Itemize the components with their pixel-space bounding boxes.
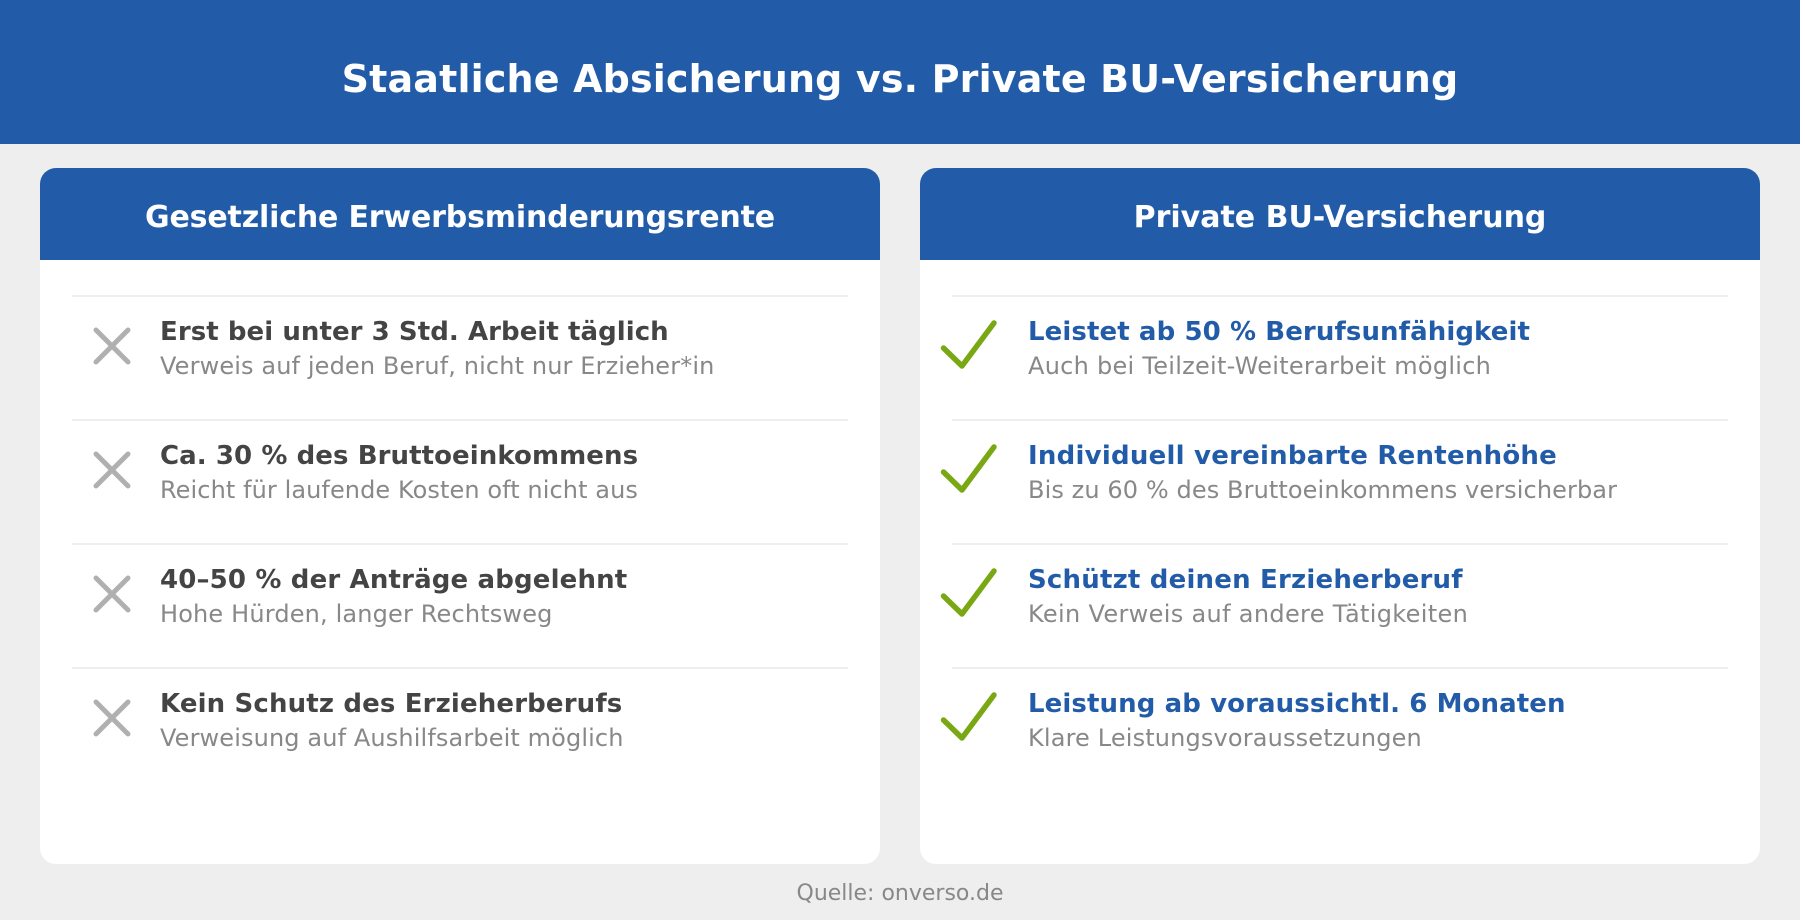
item heading: 40–50 % der Anträge abgelehnt [160,565,627,595]
panel heading: left: Gesetzliche Erwerbsminderungsrente [145,200,775,235]
header band [0,0,1800,144]
icon: cross [94,452,130,488]
item heading: Leistung ab voraussichtl. 6 Monaten [1028,689,1566,719]
panel: Private BU-Versicherung [920,168,1760,864]
item heading: Kein Schutz des Erzieherberufs [160,689,622,719]
item text: Kein Verweis auf andere Tätigkeiten [1028,600,1468,628]
item: Ca. 30 % [94,441,638,504]
panel header: right [920,168,1760,260]
item: Kein Schutz [94,689,624,752]
item text: Verweis auf jeden Beruf, nicht nur Erzieher*in [160,352,714,380]
icon: check [940,568,997,617]
title: Staatliche Absicherung vs. Private BU-Versicherung [342,57,1458,101]
icon: check [940,692,997,741]
item text: Verweisung auf Aushilfsarbeit möglich [160,724,624,752]
item: Leistet ab 50 % [940,317,1530,380]
item text: Bis zu 60 % des Bruttoeinkommens versicherbar [1028,476,1617,504]
item heading: Erst bei unter 3 Std. Arbeit täglich [160,317,669,347]
item text: Auch bei Teilzeit-Weiterarbeit möglich [1028,352,1491,380]
icon: check [940,320,997,369]
panel heading: right: Private BU-Versicherung [1134,200,1546,235]
source: Quelle: onverso.de [796,881,1004,906]
icon: cross [94,576,130,612]
icon: cross [94,328,130,364]
item text: Reicht für laufende Kosten oft nicht aus [160,476,638,504]
item heading: Ca. 30 % des Bruttoeinkommens [160,441,638,471]
item heading: Individuell vereinbarte Rentenhöhe [1028,441,1557,471]
item text: Klare Leistungsvoraussetzungen [1028,724,1422,752]
icon: cross [94,700,130,736]
item heading: Leistet ab 50 % Berufsunfähigkeit [1028,317,1530,347]
item: Erst bei unter 3 Std. [94,317,714,380]
item: Individuell [940,441,1617,504]
icon: check [940,444,997,493]
item: Schützt [940,565,1468,628]
item heading: Schützt deinen Erzieherberuf [1028,565,1463,595]
panel: Gesetzliche Erwerbsminderungsrente [40,168,880,864]
item text: Hohe Hürden, langer Rechtsweg [160,600,553,628]
item: Leistung ab [940,689,1566,752]
panel header: left [40,168,880,260]
item: 40–50 % [94,565,627,628]
